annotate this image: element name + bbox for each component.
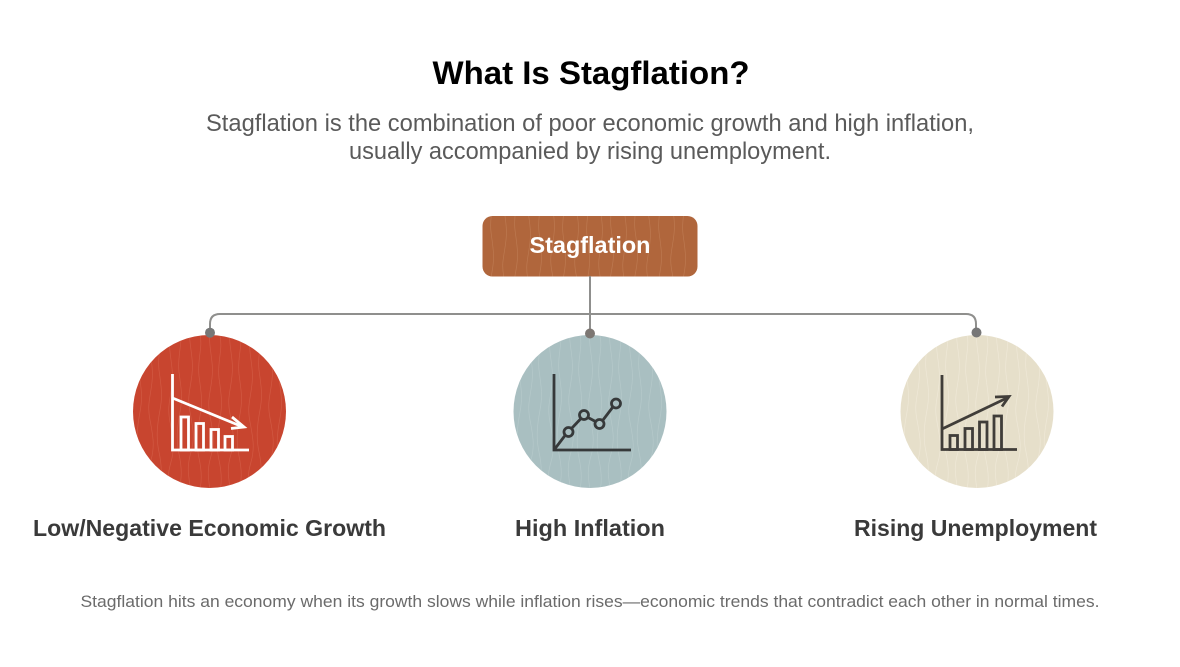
footnote: Stagflation hits an economy when its growth slows while inflation rises—economic trends that contradict each other in normal times. <box>80 592 1100 611</box>
subtitle <box>206 110 974 165</box>
circle: high inflation <box>514 335 666 488</box>
title: What Is Stagflation? <box>432 55 750 91</box>
subtitle: Stagflation is the combination of poor economic growth and high inflation, <box>206 110 974 137</box>
connector lines <box>205 276 982 338</box>
circle: rising unemployment <box>900 335 1054 488</box>
box: Stagflation: Stagflation <box>530 232 650 258</box>
circle: low/negative growth <box>133 335 286 488</box>
icon: rising bar chart <box>942 375 1017 450</box>
subtitle: usually accompanied by rising unemployment. <box>349 138 831 165</box>
box: Stagflation <box>482 216 698 276</box>
label: low/negative economic growth: Low/Negative Economic Growth <box>33 515 386 541</box>
icon: line chart <box>554 374 631 450</box>
label: high inflation: High Inflation <box>515 515 665 541</box>
icon: falling bar chart <box>172 374 249 450</box>
label: rising unemployment: Rising Unemployment <box>854 515 1097 541</box>
